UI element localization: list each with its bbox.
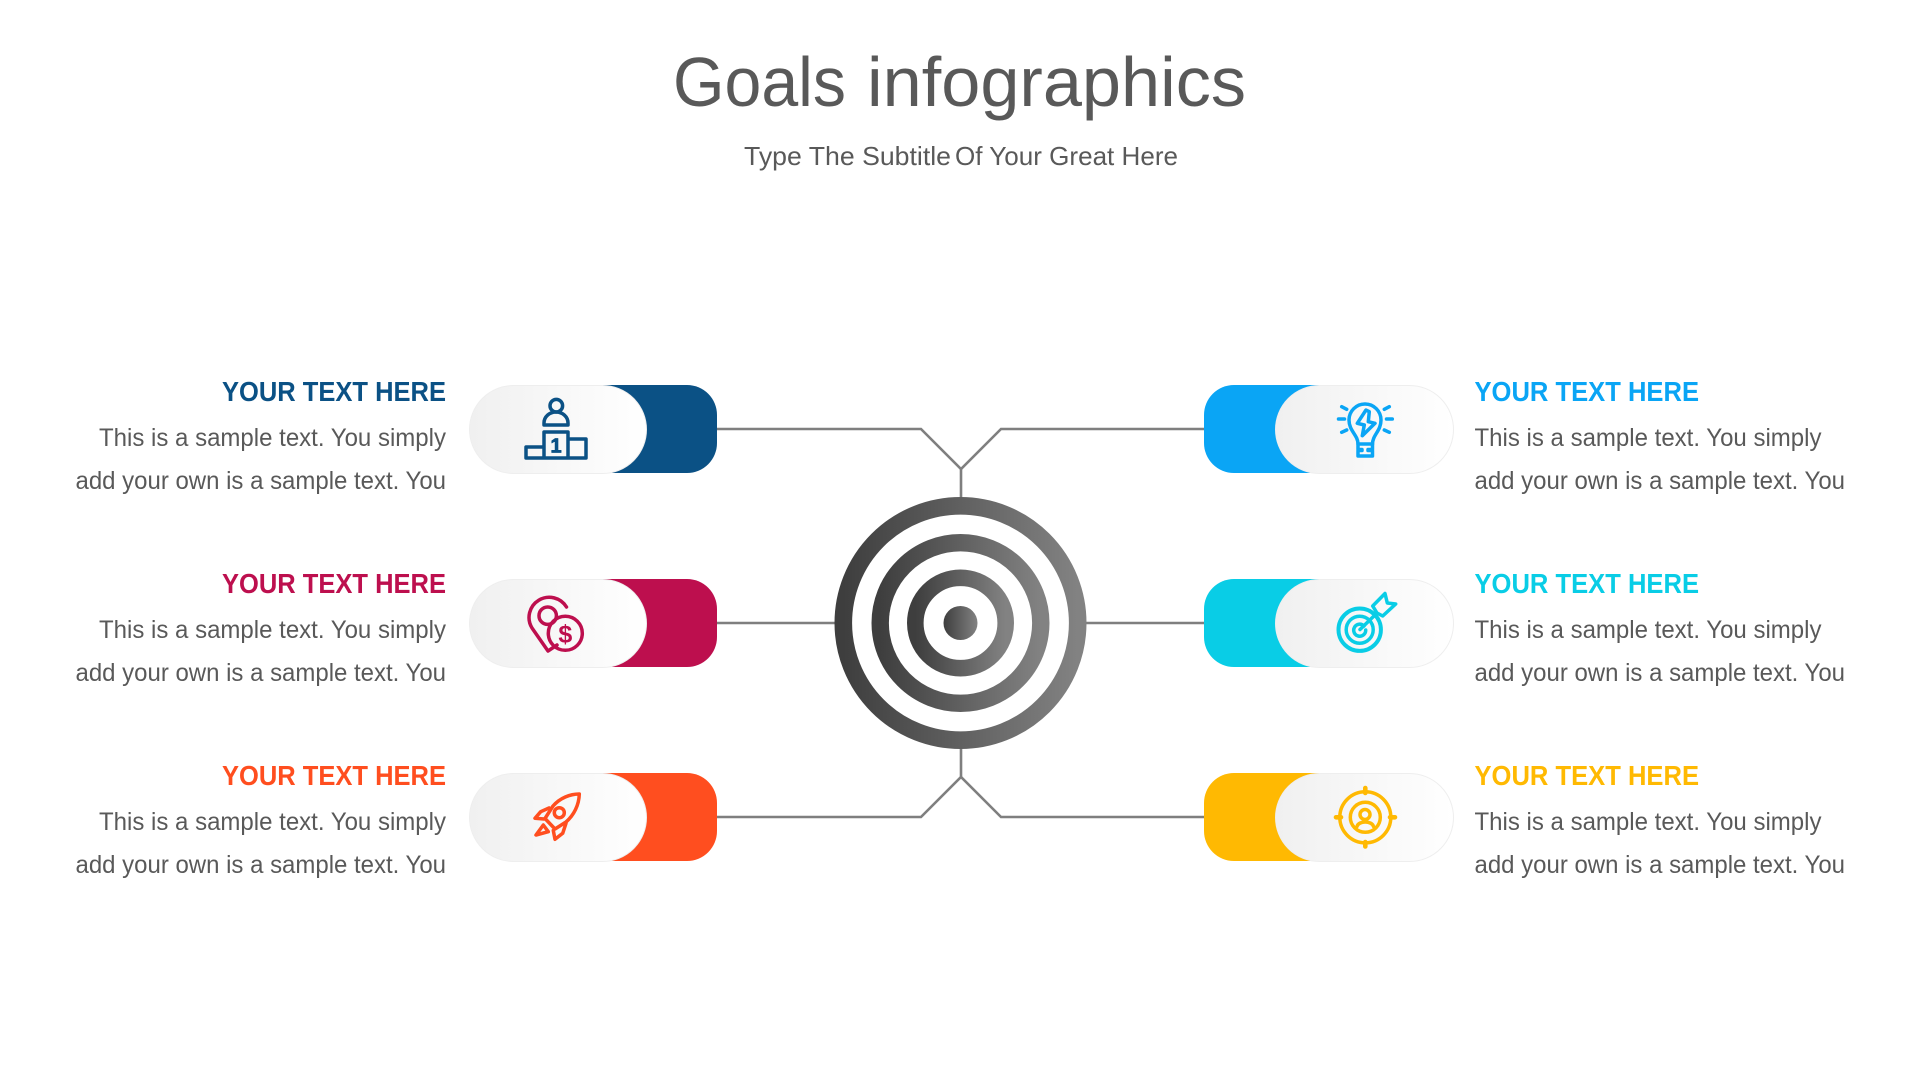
- body text: add your own is a sample text. You: [76, 659, 446, 687]
- title: infographics: [867, 43, 1246, 121]
- body text: add your own is a sample text. You: [1474, 659, 1845, 687]
- heading: YOUR TEXT HERE: [1474, 376, 1699, 407]
- title: Goals: [673, 43, 846, 121]
- panel: item 1 navy: [76, 376, 717, 495]
- panel: item 6 amber: [1204, 760, 1845, 879]
- heading: YOUR TEXT HERE: [1474, 760, 1699, 791]
- connector lines: [717, 429, 1204, 817]
- body text: This is a sample text. You simply: [99, 424, 446, 452]
- icon: podium: [526, 399, 586, 458]
- heading: YOUR TEXT HERE: [222, 376, 446, 407]
- body text: This is a sample text. You simply: [1474, 616, 1822, 644]
- body text: This is a sample text. You simply: [99, 808, 446, 836]
- body text: [76, 424, 446, 495]
- body text: [1474, 616, 1845, 687]
- body text: This is a sample text. You simply: [1474, 808, 1822, 836]
- body text: This is a sample text. You simply: [99, 616, 446, 644]
- icon: podium: 1: [550, 436, 562, 458]
- heading: YOUR TEXT HERE: [1474, 568, 1699, 599]
- subtitle: Type The Subtitle: [744, 141, 951, 171]
- body text: This is a sample text. You simply: [1474, 424, 1822, 452]
- icon: person in crosshair: [1336, 788, 1395, 846]
- title: [673, 43, 1246, 121]
- body text: add your own is a sample text. You: [76, 851, 446, 879]
- icon: location pin with dollar: [529, 597, 582, 651]
- heading: YOUR TEXT HERE: [222, 760, 446, 791]
- central target: [843, 506, 1078, 740]
- body text: [1474, 808, 1845, 879]
- body text: [1474, 424, 1845, 495]
- panel: item 3 orange: [76, 760, 717, 879]
- body text: add your own is a sample text. You: [1474, 467, 1845, 495]
- icon: location pin with dollar: $: [558, 620, 572, 648]
- panel: item 2 crimson: [76, 568, 717, 687]
- subtitle: [744, 141, 1178, 171]
- icon: light bulb: [1338, 404, 1392, 456]
- heading: YOUR TEXT HERE: [222, 568, 446, 599]
- body text: add your own is a sample text. You: [76, 467, 446, 495]
- panel: item 5 cyan: [1204, 568, 1845, 687]
- icon: target with arrow: [1338, 594, 1396, 651]
- body text: add your own is a sample text. You: [1474, 851, 1845, 879]
- panel: item 4 blue: [1204, 376, 1845, 495]
- icon: rocket: [535, 794, 579, 839]
- subtitle: Of Your Great Here: [955, 141, 1178, 171]
- body text: [76, 808, 446, 879]
- body text: [76, 616, 446, 687]
